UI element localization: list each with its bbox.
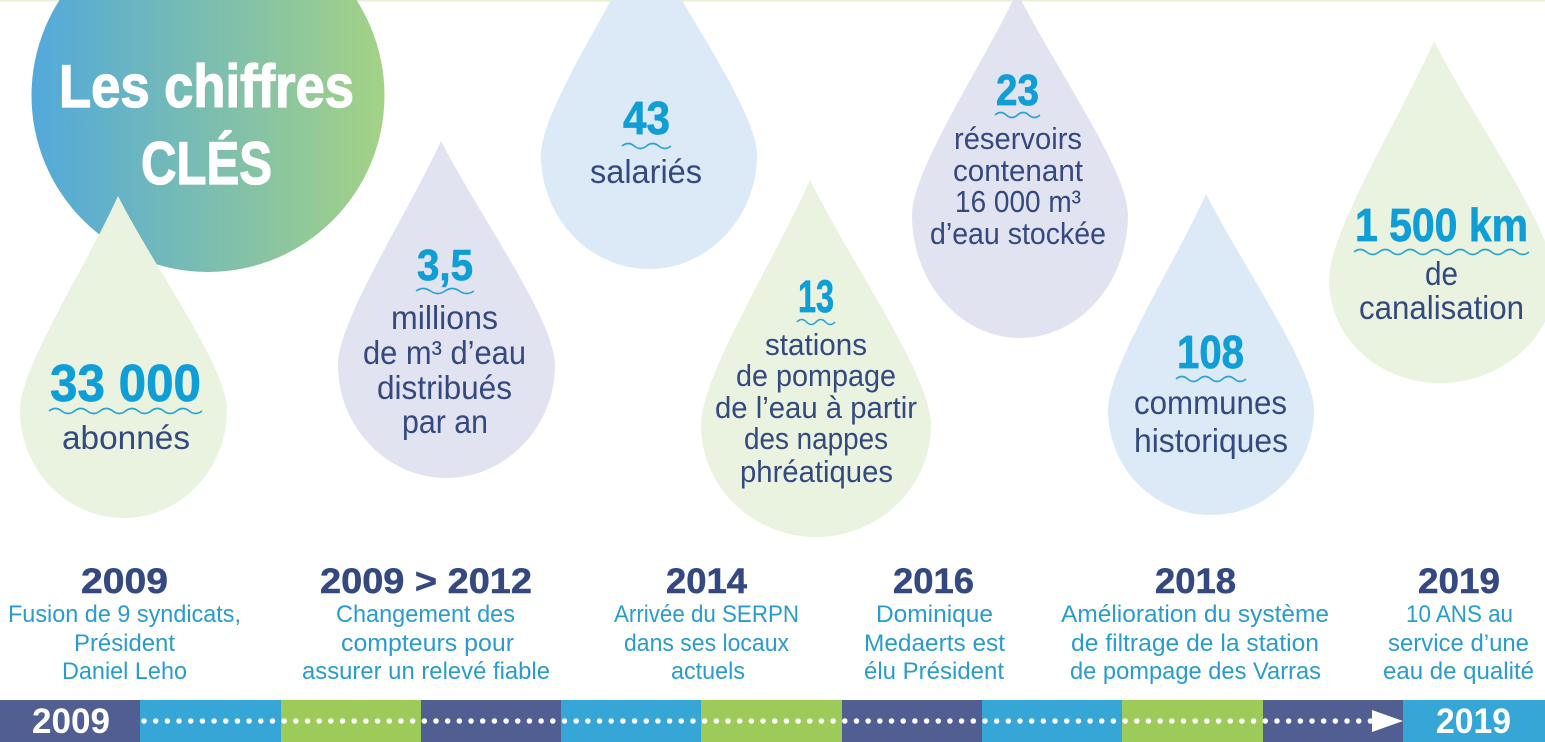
milestone 2014: actuels (671, 658, 745, 685)
milestone 2009 (8, 562, 241, 685)
milestone 2018 (1061, 562, 1329, 685)
drop: 108 communes: 108 (1177, 326, 1244, 378)
milestone 2014: Arrivée du SERPN (614, 601, 799, 628)
drop: 23 réservoirs: réservoirs (954, 121, 1082, 156)
milestone 2009 > 2012: compteurs pour (341, 630, 514, 657)
drop: 23 réservoirs: contenant (953, 153, 1083, 188)
milestone 2009: Daniel Leho (62, 658, 187, 685)
drop: 33 000 abonnés (20, 196, 227, 518)
milestone 2014: dans ses locaux (624, 630, 789, 657)
milestone 2009 > 2012: Changement des (336, 601, 515, 628)
drop: 33 000 abonnés: 33 000 (50, 355, 201, 413)
drop: 13 stations: des nappes (744, 421, 888, 456)
start year: 2009 (32, 702, 110, 741)
drop: 3,5 millions de m3: 3,5 (417, 241, 473, 290)
drop: 108 communes: communes (1134, 384, 1287, 421)
end year: 2019 (1436, 702, 1511, 741)
milestone 2016: Medaerts est (864, 630, 1005, 657)
drop: 23 réservoirs (912, 0, 1128, 338)
dotted line (144, 718, 1372, 724)
milestone 2009: Fusion de 9 syndicats, (8, 601, 241, 628)
drop: 13 stations: 13 (798, 271, 834, 322)
milestone 2019: service d’une (1388, 630, 1529, 657)
drop: 108 communes: historiques (1134, 422, 1288, 459)
drop: 3,5 millions de m3: distribués (377, 369, 512, 406)
drop: 13 stations: phréatiques (740, 454, 893, 489)
milestone 2016: Dominique (876, 601, 993, 628)
drop: 1 500 km: canalisation (1359, 289, 1524, 326)
drop: 13 stations: de l’eau à partir (715, 390, 917, 425)
milestone 2018: de pompage des Varras (1070, 658, 1321, 685)
title (59, 53, 354, 197)
milestone 2018: de filtrage de la station (1071, 630, 1319, 657)
drop: 3,5 millions de m3: de m³ d’eau (363, 334, 526, 371)
title: Les chiffres (59, 53, 354, 120)
milestone 2009 > 2012: 2009 > 2012 (320, 562, 532, 601)
drop: 43 salariés: salariés (590, 153, 702, 190)
drop: 23 réservoirs: 16 000 m³ (955, 184, 1081, 219)
milestone 2019: 10 ANS au (1406, 601, 1513, 628)
milestone 2016: élu Président (864, 658, 1004, 685)
drop: 23 réservoirs: d’eau stockée (930, 216, 1106, 251)
drop: 13 stations: de pompage (736, 358, 896, 393)
milestone 2014: 2014 (666, 562, 748, 601)
drop: 1 500 km: de (1425, 255, 1458, 292)
title circle (32, 0, 384, 272)
milestone 2016: 2016 (893, 562, 974, 601)
drop: 1 500 km: 1 500 km (1355, 199, 1528, 251)
milestone 2016 (864, 562, 1005, 685)
milestone 2009: 2009 (81, 562, 168, 601)
milestone 2009 > 2012: assurer un relevé fiable (302, 658, 550, 685)
drop: 13 stations: stations (765, 327, 867, 362)
arrow (1372, 710, 1403, 732)
timeline bar (0, 700, 1545, 742)
milestone 2019 (1383, 562, 1534, 685)
milestone 2014 (614, 562, 799, 685)
milestone 2009 > 2012 (302, 562, 550, 685)
milestone 2018: 2018 (1155, 562, 1236, 601)
title: CLÉS (141, 130, 272, 197)
drop: 1 500 km (1329, 41, 1545, 383)
milestone 2019: eau de qualité (1383, 658, 1534, 685)
drop: 3,5 millions de m3: millions (391, 299, 498, 336)
drop: 43 salariés (541, 0, 757, 269)
drop: 43 salariés: 43 (623, 92, 670, 144)
drop: 13 stations (701, 180, 931, 537)
drop: 23 réservoirs: 23 (996, 66, 1039, 115)
drop: 33 000 abonnés: abonnés (62, 419, 190, 456)
milestone 2018: Amélioration du système (1061, 601, 1329, 628)
drop: 108 communes (1108, 194, 1314, 515)
milestone 2019: 2019 (1418, 562, 1500, 601)
drop: 3,5 millions de m3 (338, 141, 555, 478)
milestone 2009: Président (74, 630, 175, 657)
drop: 3,5 millions de m3: par an (402, 403, 488, 440)
